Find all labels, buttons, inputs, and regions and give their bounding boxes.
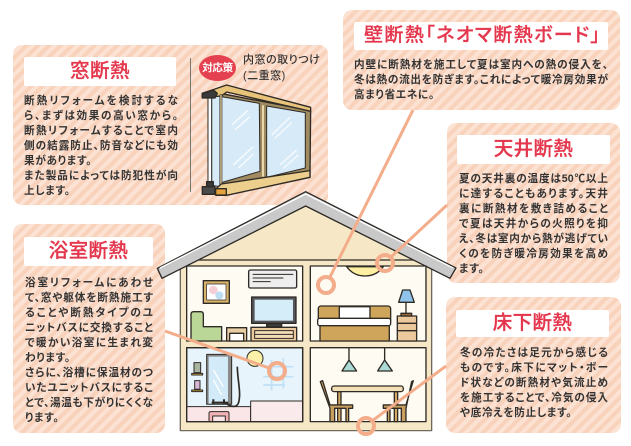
callout: underfloor — [358, 366, 446, 434]
television — [252, 297, 296, 327]
room: dining room — [310, 348, 426, 422]
nightstand — [397, 316, 417, 341]
text: bathroom insulation description: さらに、浴槽に保温材のつ — [25, 366, 153, 378]
text: window insulation description: 断熱リフォームすることで室内 — [24, 124, 178, 136]
text: bathroom insulation description: で暖かい浴室に生まれ変 — [25, 336, 153, 348]
text: underfloor insulation description: ものです。床下にマット・ボー — [460, 362, 608, 374]
text: wall insulation description: 内壁に断熱材を施工して夏は室内への熱の侵入を、 — [354, 58, 608, 70]
text: bathroom insulation description: 浴室リフォームにあわせ — [25, 276, 153, 288]
heading: ceiling insulation: 天井断熱 — [494, 138, 573, 160]
room: bathroom — [187, 348, 303, 422]
callout: bathroom — [165, 331, 285, 379]
text: underfloor insulation description — [460, 346, 608, 418]
icon: double-glazed window — [202, 85, 311, 195]
text: underfloor insulation description: 冬の冷たさは足元から感じる — [460, 346, 608, 358]
faucet — [212, 399, 228, 404]
text: window insulation description: 上します。 — [24, 184, 71, 196]
text: ceiling insulation description: に達することもあります。天井 — [459, 188, 608, 200]
heading: underfloor insulation — [456, 310, 609, 337]
text: window insulation description: 側の結露防止、防音などにも効 — [24, 140, 178, 152]
shower hose — [225, 367, 240, 406]
text: ceiling insulation description: 夏の天井裏の温度は50℃以上 — [459, 172, 608, 184]
heading: underfloor insulation: 床下断熱 — [493, 312, 572, 334]
text: bathroom insulation description: いたユニットバスにするこ — [25, 382, 153, 394]
text: ceiling insulation description: ます。 — [459, 262, 484, 274]
text: window insulation description — [24, 94, 178, 196]
text: ceiling insulation description: え、冬は室内から熱が逃げてい — [459, 232, 608, 244]
text: ceiling insulation description: で夏は天井からの火照りを抑 — [459, 218, 608, 230]
bath light — [247, 350, 263, 366]
lamp — [399, 290, 414, 316]
text: underfloor insulation description: ド状などの断熱材や気流止め — [460, 376, 608, 388]
dining table — [332, 386, 403, 422]
roof — [157, 192, 456, 278]
panel: wall insulation — [343, 10, 620, 110]
right chair — [383, 381, 413, 422]
text: bathroom insulation description: とで、湯温も下がりにくくな — [25, 396, 153, 408]
bed — [318, 306, 391, 341]
callout: ceiling — [377, 205, 447, 271]
text: wall insulation description: 冬は熱の流出を防ぎます。これによって暖冷房効果が — [354, 74, 608, 86]
bath shelves — [192, 363, 203, 392]
lit window — [263, 358, 293, 391]
heading: ceiling insulation — [457, 135, 610, 164]
divider line in window panel — [190, 58, 192, 192]
heading: wall insulation — [354, 22, 608, 50]
pendant lights — [342, 348, 392, 371]
text: inner window installation: (二重窓) — [243, 70, 286, 82]
text: bathroom insulation description: わります。 — [25, 352, 71, 364]
heading: window insulation: 窓断熱 — [70, 60, 130, 82]
air conditioner — [249, 270, 297, 288]
text: window insulation description: ら、まずは効果の高い窓から。 — [24, 110, 178, 122]
text: wall insulation description — [354, 58, 608, 100]
badge: countermeasure: 対応策 — [202, 62, 233, 74]
callout: wall — [318, 110, 413, 293]
room: living room — [187, 266, 303, 341]
panel: underfloor insulation — [446, 297, 621, 433]
panel: window insulation — [13, 45, 328, 205]
panel: ceiling insulation — [447, 123, 620, 283]
stool — [209, 412, 229, 422]
text: ceiling insulation description — [459, 172, 608, 274]
text: window insulation description: 果があります。 — [24, 154, 92, 166]
house illustration — [157, 192, 456, 431]
text: bathroom insulation description — [25, 276, 153, 424]
TV cabinet — [251, 327, 297, 341]
text: inner window installation: 内窓の取りつけ — [243, 54, 320, 66]
heading: bathroom insulation — [24, 237, 153, 266]
text: inner window installation — [243, 54, 320, 82]
text: window insulation description: また製品によっては防犯性が向 — [24, 170, 178, 182]
panel: bathroom insulation — [13, 224, 165, 433]
text: bathroom insulation description: ることや断熱タイプのユ — [25, 306, 153, 318]
sofa — [191, 312, 222, 341]
ceiling light — [347, 267, 383, 276]
shower door — [207, 354, 232, 404]
text: ceiling insulation description: 裏に断熱材を敷き詰めること — [459, 202, 608, 214]
text: bathroom insulation description: て、窓や躯体を断熱施工す — [25, 292, 153, 304]
picture frame — [203, 281, 229, 303]
side table — [227, 328, 247, 341]
text: underfloor insulation description: や底冷えを防止します。 — [460, 406, 572, 418]
heading: window insulation — [24, 57, 176, 86]
text: bathroom insulation description: ります。 — [25, 412, 59, 424]
text: underfloor insulation description: を施工することで、冷気の侵入 — [460, 392, 608, 404]
bathtub — [251, 401, 303, 422]
room: bedroom — [310, 266, 426, 341]
text: bathroom insulation description: ニットバスに交換すること — [25, 322, 153, 334]
house body — [180, 204, 432, 431]
text: ceiling insulation description: くのを防ぎ暖冷房効果を高め — [459, 248, 608, 260]
heading: bathroom insulation: 浴室断熱 — [49, 240, 128, 262]
text: wall insulation description: 高まり省エネに。 — [354, 88, 435, 100]
left chair — [320, 381, 353, 422]
text: window insulation description: 断熱リフォームを検討するな — [24, 94, 178, 106]
badge: countermeasure — [199, 55, 236, 81]
heading: wall insulation: 壁断熱「ネオマ断熱ボード」 — [364, 25, 600, 46]
